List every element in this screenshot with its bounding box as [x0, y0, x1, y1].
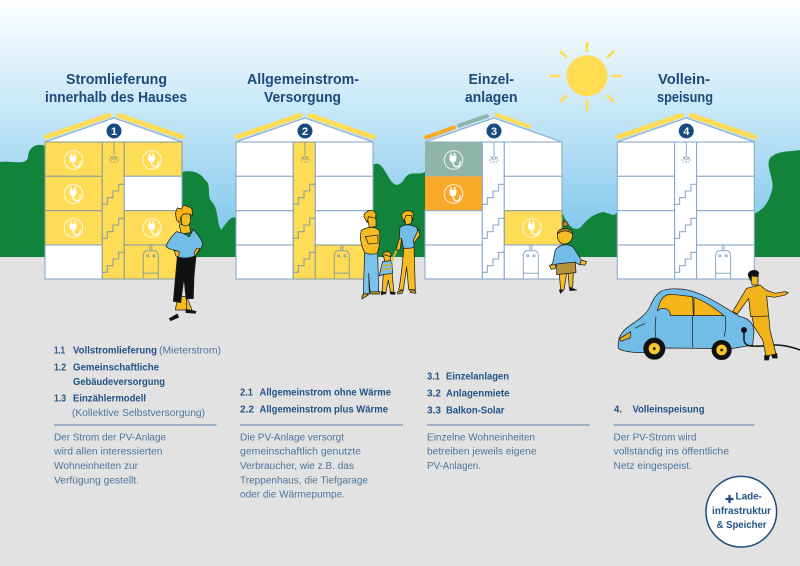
callout: charging infrastructure and storage: infrastruktur — [712, 505, 771, 517]
title 4 — [657, 71, 713, 106]
title 4: Vollein- — [658, 71, 710, 88]
rooms — [617, 142, 754, 279]
title 1 — [45, 71, 187, 106]
panel: house 3 — [425, 115, 562, 279]
list 1: 1.2 — [54, 363, 66, 374]
number badge — [486, 124, 502, 138]
number badge — [679, 124, 694, 138]
gable — [425, 118, 562, 142]
description 4: Netz eingespeist. — [614, 461, 692, 472]
list 2: Allgemeinstrom ohne Wärme — [260, 387, 391, 398]
list 2: 2.2 — [240, 404, 254, 415]
list 1: Vollstromlieferung — [73, 346, 157, 356]
list 1: Gebäudeversorgung — [73, 377, 165, 388]
list 3: 3.1 — [427, 371, 440, 382]
list 3: Einzelanlagen — [446, 371, 509, 382]
list 4: 4. — [614, 405, 622, 416]
list 2: 2.1 — [240, 387, 253, 398]
solar panels on roof — [426, 115, 529, 138]
father — [360, 211, 380, 299]
list 3: Balkon-Solar — [446, 406, 505, 417]
list 1: Einzählermodell — [73, 394, 146, 405]
title 3 — [465, 71, 518, 106]
gable — [617, 118, 754, 142]
mother — [396, 211, 420, 294]
list 3 — [427, 371, 510, 417]
ground — [0, 257, 800, 566]
description 2 — [240, 432, 368, 501]
title 2 — [247, 71, 359, 106]
description 2: Verbraucher, wie z.B. das — [240, 461, 354, 472]
list 3: 3.2 — [427, 389, 441, 400]
title 3: Einzel- — [468, 71, 514, 88]
icon: boiler — [716, 245, 731, 279]
description 3: Einzelne Wohneinheiten — [427, 432, 535, 443]
description 4 — [614, 432, 729, 472]
sun — [550, 42, 622, 111]
icons: plugs — [64, 151, 161, 237]
icon: lamp — [489, 142, 499, 163]
list 4: Volleinspeisung — [632, 405, 704, 416]
title 1: innerhalb des Hauses — [45, 89, 187, 106]
icon: boiler — [523, 245, 538, 279]
description 3: betreiben jeweils eigene — [427, 447, 537, 458]
rooms — [425, 142, 562, 279]
list 1: 1.3 — [54, 394, 66, 405]
list 2: Allgemeinstrom plus Wärme — [260, 404, 388, 415]
description 4: vollständig ins öffentliche — [614, 447, 729, 458]
car with charging man — [618, 270, 800, 360]
headlight — [619, 332, 631, 341]
number badge: 1 — [111, 126, 117, 138]
list 1: (Mieterstrom) — [159, 346, 221, 356]
gable — [236, 118, 373, 142]
person: woman with hands on hips — [166, 205, 203, 321]
icon: lamp — [681, 142, 691, 163]
number badge — [298, 124, 312, 138]
icon: boiler — [334, 245, 349, 279]
number badge: 4 — [683, 126, 690, 138]
text block 2 — [240, 387, 403, 501]
panel: house 2 — [236, 116, 373, 279]
description 2: oder die Wärmepumpe. — [240, 490, 345, 501]
description 3 — [427, 432, 537, 472]
number badge: 3 — [491, 126, 497, 138]
list 1: (Kollektive Selbstversorgung) — [72, 408, 205, 419]
icon: boiler — [143, 245, 158, 279]
description 1 — [53, 432, 166, 486]
text block 3 — [427, 371, 590, 472]
gable — [45, 118, 182, 142]
description 2: Die PV-Anlage versorgt — [240, 432, 344, 443]
list 1 — [54, 346, 221, 419]
callout: charging infrastructure and storage: & Speicher — [716, 519, 766, 531]
panel: house 1 — [45, 116, 182, 279]
list 3: Anlagenmiete — [446, 389, 510, 400]
staircase — [102, 184, 124, 272]
icon: lamp — [300, 142, 310, 163]
callout: charging infrastructure and storage — [706, 476, 777, 547]
list 3: 3.3 — [427, 406, 441, 417]
title 2: Versorgung — [264, 89, 341, 106]
icon: lamp — [109, 142, 119, 163]
text block 1 — [53, 346, 221, 486]
car windows — [657, 294, 724, 316]
number badge: 2 — [302, 126, 308, 138]
panel: house 4 — [617, 116, 754, 279]
icons: plugs — [444, 151, 541, 237]
description 4: Der PV-Strom wird — [614, 432, 696, 443]
text block 4 — [614, 405, 754, 472]
charging cable — [744, 330, 800, 350]
staircase — [675, 184, 697, 272]
rooms — [45, 142, 182, 279]
trees and hedges — [0, 145, 800, 258]
description 2: Treppenhaus, die Tiefgarage — [240, 475, 368, 486]
description 2: gemeinschaftlich genutzte — [240, 447, 361, 458]
description 1: wird allen interessierten — [53, 447, 162, 458]
list 2 — [240, 387, 391, 415]
list 1: 1.1 — [54, 346, 65, 356]
wheels — [644, 338, 731, 360]
car body — [618, 289, 754, 353]
description 3: PV-Anlagen. — [427, 461, 481, 472]
description 1: Wohneinheiten zur — [54, 461, 139, 472]
person: older woman — [549, 221, 587, 293]
car details — [635, 316, 726, 347]
solar panels on roof — [237, 116, 373, 137]
description 1: Der Strom der PV-Anlage — [54, 432, 166, 443]
list 1: Gemeinschaftliche — [73, 363, 159, 374]
title 3: anlagen — [465, 89, 518, 106]
callout: charging infrastructure and storage: Lade- — [736, 490, 762, 502]
number badge — [106, 124, 122, 138]
title 2: Allgemeinstrom- — [247, 71, 359, 88]
staircase — [293, 184, 315, 272]
staircase — [482, 184, 504, 272]
title 1: Stromlieferung — [66, 71, 167, 88]
sky background — [0, 0, 800, 258]
solar panels on roof — [618, 116, 754, 137]
rooms — [236, 142, 373, 279]
man — [733, 270, 788, 360]
child — [379, 250, 397, 295]
person group: family — [360, 211, 420, 299]
title 4: speisung — [657, 89, 713, 106]
description 1: Verfügung gestellt. — [54, 475, 139, 486]
solar panels on roof — [46, 116, 182, 137]
